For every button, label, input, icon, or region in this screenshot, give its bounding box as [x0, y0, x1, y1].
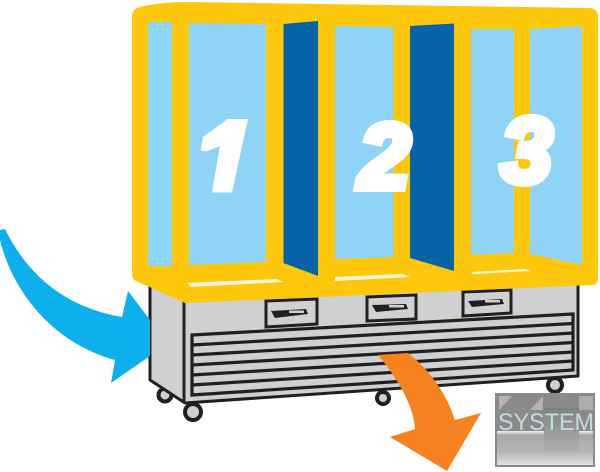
arrow: orange air exhaust — [378, 353, 481, 471]
glass panel 5 — [530, 26, 582, 265]
logo: System 4: SYSTEM — [498, 409, 594, 436]
logo: System 4 — [495, 393, 595, 467]
control panel 1 — [266, 299, 317, 327]
number 1: 1 — [193, 96, 249, 208]
dark side door 2 — [410, 24, 454, 271]
glass panel 2 — [189, 23, 266, 265]
control panel 2 — [367, 295, 416, 321]
glass panel 1 — [148, 22, 172, 266]
control panel 3 — [463, 290, 511, 316]
number 2: 2 — [357, 106, 410, 208]
shelf highlights — [188, 269, 531, 287]
wheels — [158, 378, 562, 420]
ventilation grille — [192, 314, 573, 395]
arrow: blue air intake — [0, 229, 150, 383]
dark side door 1 — [284, 21, 318, 276]
number 3: 3 — [501, 100, 552, 202]
glass panel 3 — [335, 26, 394, 259]
glass panel 4 — [471, 29, 514, 255]
cabinet body — [150, 278, 578, 403]
yellow display case frame — [132, 2, 598, 303]
